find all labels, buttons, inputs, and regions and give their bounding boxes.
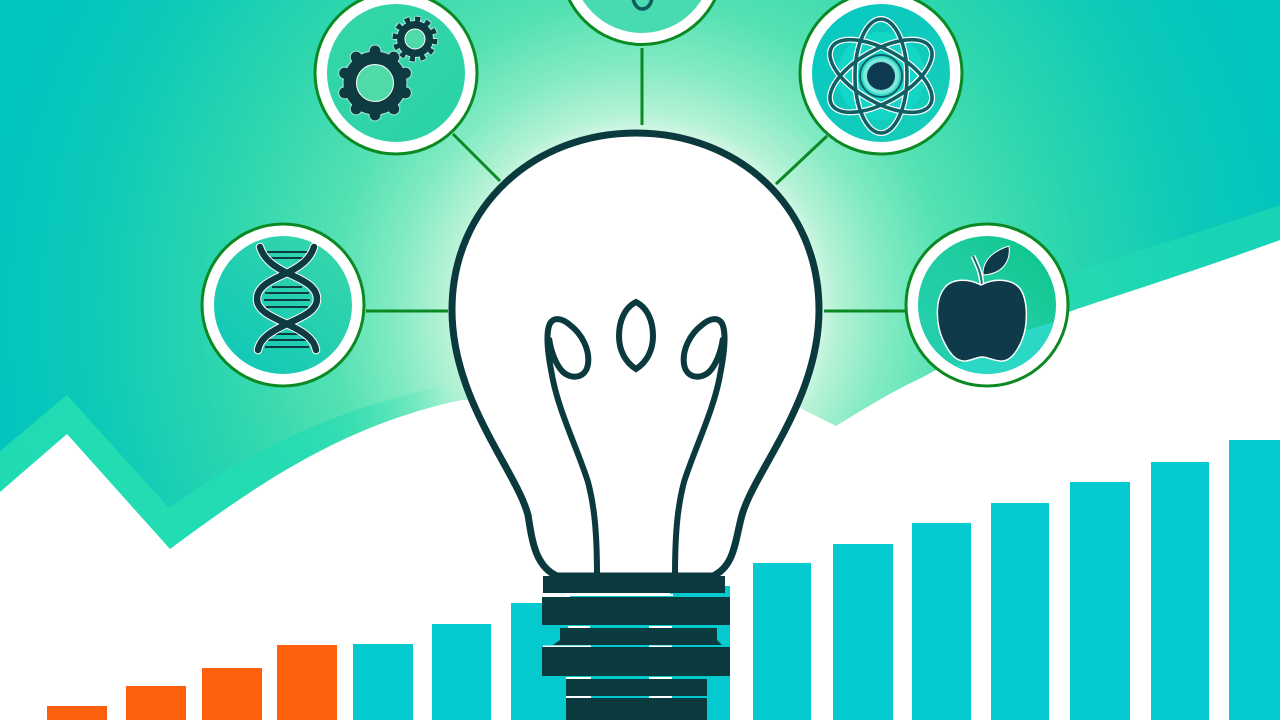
rising band: mint edge of the white area (0, 205, 1280, 720)
disc lower band (955, 322, 1054, 374)
right filament (675, 319, 724, 576)
centre filament (619, 302, 653, 369)
atom inner tint (837, 32, 925, 120)
thread highlights (543, 594, 673, 698)
atom orbits (819, 19, 943, 133)
large gear (345, 51, 405, 115)
bulb glass (452, 133, 819, 576)
base rings (542, 576, 730, 720)
nucleus (860, 55, 902, 97)
orange bars (47, 645, 337, 720)
light bulb (452, 133, 819, 720)
atom orbit lines (819, 19, 943, 133)
icon: DNA (202, 224, 364, 386)
connector lines (366, 48, 905, 311)
DNA strands (257, 247, 317, 350)
bar chart (47, 440, 1280, 720)
icon: gears (315, 0, 477, 154)
large gear hole (356, 64, 394, 102)
white lower area (0, 240, 1280, 720)
small gear (396, 20, 434, 58)
icon: atom (800, 0, 962, 154)
left filament (548, 319, 597, 576)
droplet glyph (633, 0, 652, 9)
apple body (937, 280, 1026, 361)
teal bars (353, 440, 1280, 720)
small gear hole (405, 29, 425, 49)
icon: apple (906, 224, 1068, 386)
apple stem (973, 256, 982, 285)
DNA rungs (264, 252, 310, 347)
icon: top partially cropped (560, 0, 724, 44)
apple stem core (973, 256, 982, 285)
apple leaf (983, 246, 1009, 275)
screw base (542, 576, 730, 720)
